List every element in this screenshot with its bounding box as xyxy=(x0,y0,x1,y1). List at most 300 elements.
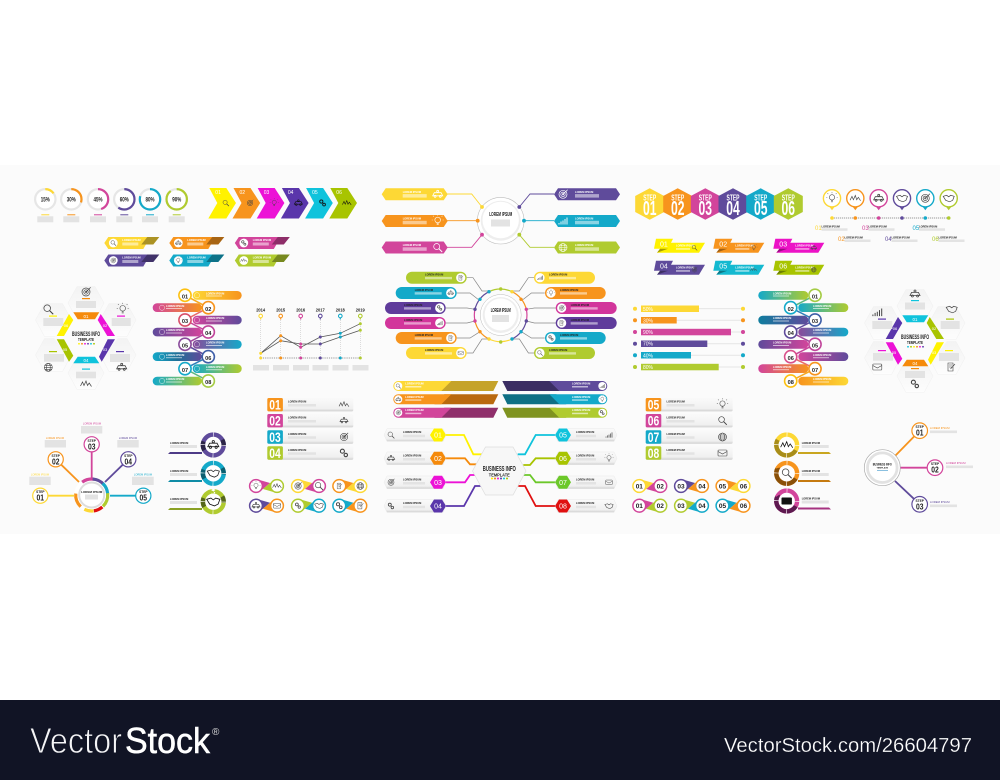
card 07: 07 xyxy=(648,429,659,445)
centre title: BUSINESS INFO xyxy=(72,331,100,338)
card 06 xyxy=(555,452,617,465)
central hexagon: TEMPLATE xyxy=(489,472,510,478)
step numbers: 01 xyxy=(812,294,818,300)
card 04 xyxy=(267,445,353,461)
card 05 xyxy=(555,428,617,442)
panel: numbered cards right xyxy=(646,397,733,461)
bar orange left: LOREM IPSUM xyxy=(415,333,433,337)
panel: middle centre ring with twelve bars xyxy=(385,272,617,359)
tab 06: 06 xyxy=(779,264,787,271)
label orange xyxy=(382,215,448,227)
snake bar labels: LOREM IPSUM xyxy=(813,377,831,381)
card 04: LOREM IPSUM xyxy=(403,501,421,505)
card 08 xyxy=(646,445,733,461)
hex step 02: 02 xyxy=(671,198,684,220)
baseline xyxy=(261,357,360,359)
timeline legend: LOREM IPSUM xyxy=(938,236,957,240)
hex step 02 xyxy=(663,188,692,220)
step captions xyxy=(930,426,973,507)
image id: VectorStock.com/26604797 xyxy=(724,735,972,757)
hex step 05: 05 xyxy=(754,198,767,220)
step 03 xyxy=(912,496,928,512)
pins xyxy=(259,314,362,320)
pair 05 06 orange yellow: 05 xyxy=(719,483,726,490)
label purple: LOREM IPSUM xyxy=(575,190,593,194)
donut 80%: 80% xyxy=(146,197,155,204)
timeline legend: LOREM IPSUM xyxy=(919,224,937,228)
snake bar labels: LOREM IPSUM xyxy=(166,377,184,381)
segment 06: 06 xyxy=(893,326,898,331)
card 02: 02 xyxy=(269,413,281,429)
step circles xyxy=(785,289,821,387)
right ribbon cyan: LOREM IPSUM xyxy=(572,395,590,399)
pair 05 06 orange yellow: 06 xyxy=(740,483,747,490)
segment 02: 02 xyxy=(932,326,937,331)
panel: left snake steps xyxy=(153,289,242,387)
segment 04: 04 xyxy=(84,358,89,363)
label cyan: LOREM IPSUM xyxy=(575,216,593,220)
right ribbon purple xyxy=(502,381,607,391)
bar yellow right xyxy=(534,272,595,284)
card 01 xyxy=(384,428,446,442)
bar green left xyxy=(406,272,467,284)
connecting zigzag line xyxy=(185,295,208,381)
registered mark: ® xyxy=(212,727,220,738)
spokes xyxy=(40,444,143,496)
segment 04: 04 xyxy=(913,361,918,366)
card 05: LOREM IPSUM xyxy=(576,430,594,434)
hub circle: LOREM IPSUM xyxy=(489,212,512,218)
card 03: 03 xyxy=(269,429,281,445)
panel: pin timeline xyxy=(815,190,964,243)
bar magenta left xyxy=(385,317,446,329)
hex step 06: STEP xyxy=(782,194,795,203)
pair 03 04 green cyan: 04 xyxy=(698,503,706,510)
gridlines xyxy=(261,318,360,358)
label magenta xyxy=(382,242,448,254)
timeline legend: LOREM IPSUM xyxy=(844,236,863,240)
step 01: STEP xyxy=(916,425,925,429)
bar 80%: 80% xyxy=(643,365,654,371)
step 02: STEP xyxy=(931,462,940,466)
chevron 01 xyxy=(208,188,236,218)
pair 05 06 cyan orange: 06 xyxy=(740,503,747,510)
bar green right: LOREM IPSUM xyxy=(549,348,567,352)
card 02: LOREM IPSUM xyxy=(288,416,306,420)
step numbers: 04 xyxy=(788,331,795,337)
panel: paired number links xyxy=(633,479,750,513)
snake bar labels xyxy=(159,292,224,384)
bar 30%: 30% xyxy=(643,318,654,324)
bar green right xyxy=(534,347,595,359)
chevron 06 xyxy=(329,188,357,218)
timeline legend: 01 xyxy=(815,226,822,232)
label purple xyxy=(554,188,620,200)
pair 03 04 green cyan xyxy=(675,499,708,513)
hex step 02: STEP xyxy=(671,194,685,203)
timeline legend: 06 xyxy=(932,237,939,243)
timeline legend: 03 xyxy=(862,226,869,232)
donut 60% xyxy=(114,189,134,222)
card 01 xyxy=(267,397,353,413)
bar cyan left xyxy=(396,287,457,299)
label yellow xyxy=(382,188,448,200)
card 08: LOREM IPSUM xyxy=(666,448,685,452)
timeline legend: 02 xyxy=(838,237,845,243)
tab 03: 03 xyxy=(779,242,787,249)
step captions: LOREM IPSUM xyxy=(134,472,152,476)
segment 06: 06 xyxy=(64,323,69,328)
timeline legend: 05 xyxy=(912,226,920,232)
panel: chevron arrows xyxy=(208,188,357,218)
card 03 xyxy=(384,476,446,489)
card 07 xyxy=(646,429,733,445)
pair yellow magenta xyxy=(292,479,325,493)
step numbers: 07 xyxy=(182,368,188,374)
pin cyan xyxy=(917,190,934,220)
card 02 xyxy=(384,452,446,465)
segment 05: 05 xyxy=(63,347,68,352)
panel: numbered tab ribbons xyxy=(654,239,824,275)
pair 05 06 cyan orange xyxy=(716,499,750,513)
left ribbon yellow: LOREM IPSUM xyxy=(405,382,424,386)
label green: LOREM IPSUM xyxy=(575,243,593,247)
snake bars xyxy=(153,291,242,385)
ribbon orange xyxy=(169,237,224,249)
step numbers: 06 xyxy=(788,356,794,362)
centre title xyxy=(72,331,100,345)
ribbon purple xyxy=(104,254,159,266)
step 01 xyxy=(912,423,928,438)
footer background xyxy=(0,700,1000,780)
bar 40%: 40% xyxy=(643,353,654,359)
pair cyan orange xyxy=(333,499,367,513)
right ribbon green xyxy=(502,408,607,418)
ribbon cyan xyxy=(169,254,224,266)
step numbers xyxy=(182,294,212,386)
segment 01: 01 xyxy=(913,317,918,322)
right ribbon cyan xyxy=(502,394,607,404)
footer bar xyxy=(0,700,1000,780)
pin green xyxy=(940,190,957,220)
timeline line xyxy=(832,217,949,219)
timeline legend: LOREM IPSUM xyxy=(868,224,887,228)
tab 02: LOREM IPSUM xyxy=(735,244,754,248)
ribbon magenta xyxy=(235,237,290,249)
step 03 xyxy=(84,437,99,452)
panel: percentage donuts xyxy=(35,189,187,222)
tab 02 xyxy=(713,239,764,253)
panel: left ring icons xyxy=(168,431,228,516)
donut 45%: 45% xyxy=(94,197,103,204)
timeline legend: LOREM IPSUM xyxy=(892,236,910,240)
step 01: 01 xyxy=(916,428,924,438)
connector lines xyxy=(447,194,554,247)
pair orange yellow xyxy=(333,479,367,493)
timeline legend xyxy=(815,224,964,243)
chevron 05: 05 xyxy=(312,190,318,196)
step 03: STEP xyxy=(916,499,925,503)
bar magenta left: LOREM IPSUM xyxy=(404,318,422,322)
chevron 04: 04 xyxy=(288,190,294,196)
card 01: LOREM IPSUM xyxy=(288,400,306,404)
step 02: STEP xyxy=(52,454,61,458)
panel: left hexagon business template xyxy=(36,286,136,390)
panel: step hexagons xyxy=(635,188,803,220)
step numbers: 04 xyxy=(205,331,212,337)
panel: slanted double ribbons xyxy=(393,381,607,418)
ring dots xyxy=(473,287,528,344)
step captions: LOREM IPSUM xyxy=(46,436,64,440)
year labels: 2018 xyxy=(336,308,345,312)
card 06: LOREM IPSUM xyxy=(576,454,594,458)
step 04: 04 xyxy=(125,456,132,466)
bar orange right xyxy=(545,287,606,299)
step captions: LOREM IPSUM xyxy=(930,500,950,504)
snake bars xyxy=(758,291,848,385)
panel: centre business info mind map xyxy=(384,428,617,512)
connector lines xyxy=(446,435,555,506)
step numbers: 03 xyxy=(182,319,188,325)
snake bar labels: LOREM IPSUM xyxy=(773,365,791,369)
hex step 06 xyxy=(774,188,803,220)
pair 05 06 cyan orange: 05 xyxy=(719,503,726,510)
label orange: LOREM IPSUM xyxy=(403,216,421,220)
centre title xyxy=(901,334,929,348)
card 07: 07 xyxy=(559,480,567,487)
donut 45% xyxy=(88,189,108,222)
tab 03 xyxy=(773,239,824,253)
card 06: LOREM IPSUM xyxy=(666,416,685,420)
central hexagon: BUSINESS INFO xyxy=(483,466,516,473)
card 07: LOREM IPSUM xyxy=(666,432,685,436)
horizontal percentage bars xyxy=(633,306,745,371)
donut 80% xyxy=(140,189,160,222)
step captions: LOREM IPSUM xyxy=(946,461,966,465)
chevron 02: 02 xyxy=(240,190,245,196)
card 02 xyxy=(267,413,353,429)
card 03: 03 xyxy=(434,480,442,487)
connector lines xyxy=(446,278,556,353)
coloured ring xyxy=(474,289,527,342)
hex step 04: 04 xyxy=(726,198,740,220)
tab 06: LOREM IPSUM xyxy=(795,266,814,270)
snake bar labels: LOREM IPSUM xyxy=(773,316,791,320)
card 02: LOREM IPSUM xyxy=(403,454,421,458)
panel: light grey content band xyxy=(0,165,1000,534)
chevron 05 xyxy=(305,188,333,218)
step circles xyxy=(179,289,214,387)
ribbon yellow xyxy=(104,237,159,249)
tab 01 xyxy=(654,239,705,253)
step 05: STEP xyxy=(139,490,148,494)
bar orange left xyxy=(396,332,457,344)
hex step 01: 01 xyxy=(643,198,656,220)
card 04 xyxy=(384,500,446,512)
card 08: 08 xyxy=(648,445,659,461)
snake bar labels: LOREM IPSUM xyxy=(206,292,224,296)
tab 05: 05 xyxy=(719,264,727,271)
snake bar labels: LOREM IPSUM xyxy=(813,304,831,308)
centre circle xyxy=(480,294,521,336)
pair 01 02 magenta green xyxy=(633,499,667,513)
step 03: 03 xyxy=(88,441,96,451)
hex step 05: STEP xyxy=(754,194,768,203)
pair 05 06 orange yellow xyxy=(716,479,750,493)
label magenta: LOREM IPSUM xyxy=(403,243,421,247)
tab 01: 01 xyxy=(660,242,668,249)
right ribbon purple: LOREM IPSUM xyxy=(572,382,590,386)
centre title: TEMPLATE xyxy=(78,337,94,342)
step captions: LOREM IPSUM xyxy=(930,426,950,430)
card 03 xyxy=(267,429,353,445)
panel: top centre lorem ipsum hub xyxy=(382,188,620,254)
snake bar labels: LOREM IPSUM xyxy=(773,340,791,344)
step 01 xyxy=(33,488,48,503)
chevron 03: 03 xyxy=(264,190,269,196)
donut 30% xyxy=(61,189,82,222)
card 06 xyxy=(646,413,733,429)
panel: right radial three steps xyxy=(864,423,973,512)
pair 01 02 yellow magenta: 02 xyxy=(657,483,664,490)
central hexagon xyxy=(472,447,526,495)
pair 01 02 yellow magenta xyxy=(633,479,667,493)
centre circle: BUSINESS INFO xyxy=(873,462,892,466)
ring magenta: LOREM IPSUM xyxy=(802,496,820,500)
panel: right hexagon business template xyxy=(864,290,965,392)
tab 02: 02 xyxy=(719,242,727,249)
hex step 04: STEP xyxy=(726,194,740,203)
chevron 06: 06 xyxy=(336,190,342,196)
segment 05: 05 xyxy=(892,350,897,355)
hub circle xyxy=(477,197,524,244)
left ribbon orange: LOREM IPSUM xyxy=(405,395,424,399)
logo: Stock bold: Stock xyxy=(125,720,211,761)
hub dots xyxy=(476,205,526,237)
tab 01: LOREM IPSUM xyxy=(676,244,694,248)
step captions: LOREM IPSUM xyxy=(31,472,49,476)
tab 04: LOREM IPSUM xyxy=(676,266,694,270)
step numbers: 08 xyxy=(788,380,794,386)
left ribbon magenta: LOREM IPSUM xyxy=(405,408,424,412)
chevron 02 xyxy=(232,188,260,218)
card 08 xyxy=(555,500,617,512)
tab 06 xyxy=(773,261,824,275)
petal contents xyxy=(43,287,131,386)
left ribbon yellow xyxy=(393,381,498,391)
pin yellow xyxy=(823,190,841,220)
bar yellow right: LOREM IPSUM xyxy=(549,273,567,277)
pair 01 02 magenta green: 02 xyxy=(657,503,664,510)
chart captions xyxy=(253,365,368,370)
centre circle: LOREM IPSUM xyxy=(491,308,511,314)
bar orange right: LOREM IPSUM xyxy=(560,288,578,292)
bar cyan left: LOREM IPSUM xyxy=(415,288,433,292)
pair green cyan xyxy=(292,499,325,513)
step 02 xyxy=(48,452,63,467)
pair 01 02 yellow magenta: 01 xyxy=(636,483,643,490)
ring purple: LOREM IPSUM xyxy=(170,441,188,445)
bar purple right xyxy=(556,317,617,329)
snake bar labels xyxy=(773,292,831,382)
snake bar labels: LOREM IPSUM xyxy=(166,304,184,308)
donut 90% xyxy=(166,189,187,222)
step 04 xyxy=(121,452,136,467)
timeline legend: 04 xyxy=(885,237,892,243)
pair 03 04 purple orange xyxy=(675,479,708,493)
bar magenta right: LOREM IPSUM xyxy=(571,303,589,307)
hex step 06: 06 xyxy=(782,198,795,220)
tab 05: LOREM IPSUM xyxy=(735,266,754,270)
card 03: LOREM IPSUM xyxy=(288,432,306,436)
hex step 03: STEP xyxy=(699,194,712,203)
pair 03 04 green cyan: 03 xyxy=(677,503,685,510)
bar tracks xyxy=(641,308,743,368)
panel: right ring icons xyxy=(772,431,831,515)
step 02 xyxy=(927,460,943,476)
hexagon petals xyxy=(36,286,136,390)
hex step 05 xyxy=(746,188,775,220)
donut 15% xyxy=(35,189,56,222)
year labels xyxy=(256,308,365,312)
snake bar labels: LOREM IPSUM xyxy=(206,316,224,320)
year labels: 2019 xyxy=(356,308,365,312)
year labels: 2016 xyxy=(296,308,306,312)
step captions: LOREM IPSUM xyxy=(119,436,137,440)
centre circle xyxy=(864,450,900,486)
step numbers: 05 xyxy=(182,344,188,350)
bar cyan right: LOREM IPSUM xyxy=(560,333,578,337)
bar 70%: 70% xyxy=(643,342,654,348)
card 08: LOREM IPSUM xyxy=(576,501,594,505)
snake bar labels: LOREM IPSUM xyxy=(166,328,184,332)
ring yellow: LOREM IPSUM xyxy=(802,441,820,445)
card 02: 02 xyxy=(434,456,442,463)
step numbers: 06 xyxy=(205,356,211,362)
snake bar labels: LOREM IPSUM xyxy=(206,340,224,344)
panel: numbered cards left xyxy=(267,397,353,461)
snake bar labels: LOREM IPSUM xyxy=(813,328,831,332)
ribbon green: LOREM IPSUM xyxy=(253,255,271,259)
donut 30%: 30% xyxy=(67,197,76,204)
step numbers xyxy=(788,294,818,386)
panel: ribbon labels xyxy=(104,237,290,266)
bar 90%: 90% xyxy=(643,330,654,336)
card 01: 01 xyxy=(269,397,281,413)
ring orange: LOREM IPSUM xyxy=(802,469,820,473)
step numbers: 08 xyxy=(205,380,211,386)
step numbers: 05 xyxy=(812,344,818,350)
label yellow: LOREM IPSUM xyxy=(403,190,421,194)
ribbon cyan: LOREM IPSUM xyxy=(187,255,206,259)
pin orange xyxy=(847,190,864,220)
card 05 xyxy=(646,397,733,413)
card 03: LOREM IPSUM xyxy=(403,478,421,482)
ribbon magenta: LOREM IPSUM xyxy=(253,238,271,242)
bar green left: LOREM IPSUM xyxy=(425,273,443,277)
step captions xyxy=(29,422,154,485)
step 01: 01 xyxy=(37,493,44,503)
bar cyan right xyxy=(545,332,606,344)
centre white hexagon xyxy=(54,314,118,362)
ribbon yellow: LOREM IPSUM xyxy=(122,238,141,242)
connecting zigzag line xyxy=(791,295,815,381)
pin magenta xyxy=(870,190,887,220)
segment 03: 03 xyxy=(103,347,108,352)
snake bar labels: LOREM IPSUM xyxy=(773,292,791,296)
card 06: 06 xyxy=(559,456,567,463)
step numbers: 03 xyxy=(812,319,818,325)
